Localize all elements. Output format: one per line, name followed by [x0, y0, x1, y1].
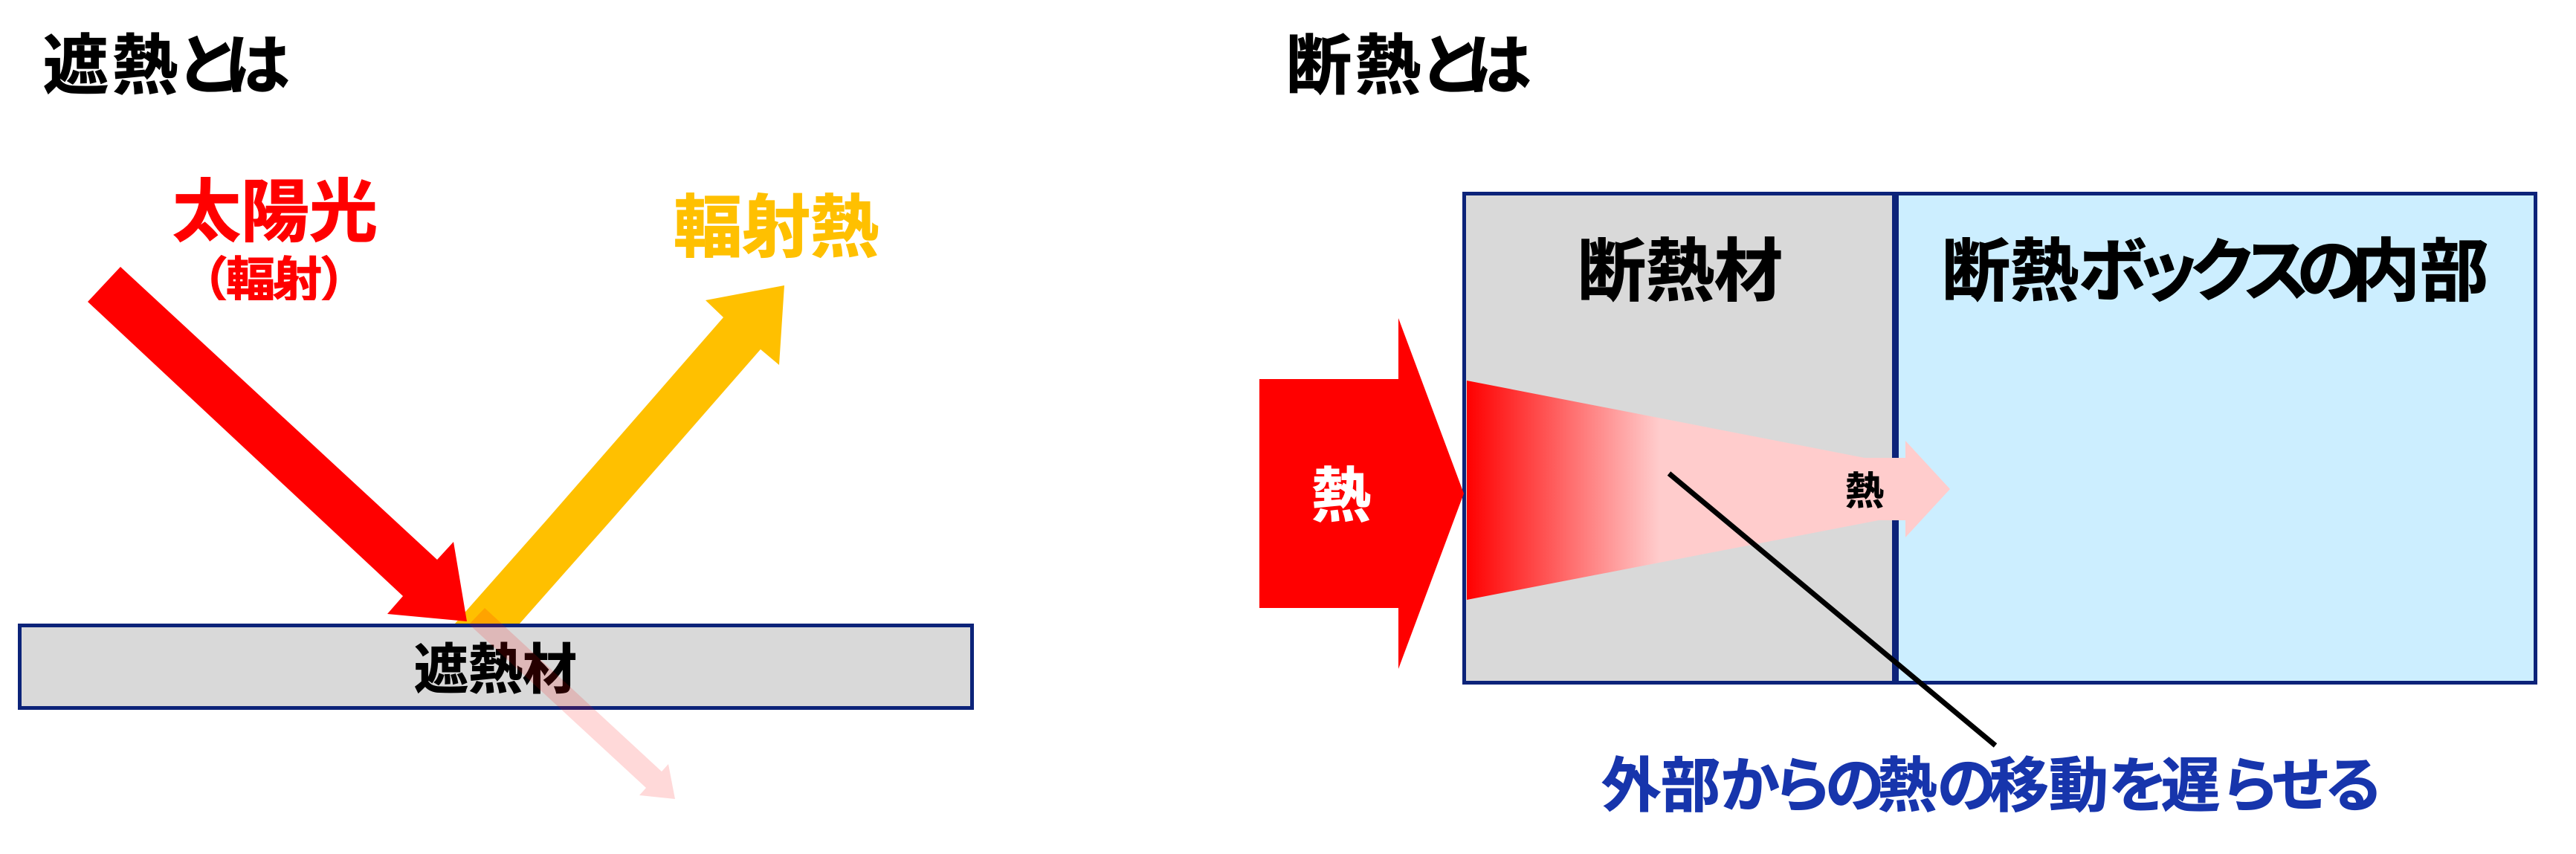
leader line	[1669, 473, 1995, 745]
label: heat, white: 熱	[1311, 463, 1371, 529]
label: heat shielding material: 遮熱材	[414, 640, 577, 700]
panel: heat insulation	[1259, 29, 2535, 819]
label: radiation sub-caption: （輻射）	[179, 253, 367, 308]
panel: heat shielding	[19, 29, 972, 799]
label: radiant heat: 輻射熱	[674, 190, 879, 266]
box: insulation material	[1465, 193, 1896, 682]
label: inside of insulation box: 断熱ボックスの内部	[1942, 234, 2488, 310]
arrow: sunlight incoming	[88, 267, 467, 621]
arrow: radiant heat reflected	[455, 285, 784, 624]
label: heat, small: 熱	[1845, 470, 1884, 514]
callout: slows the movement of heat from outside: 外部からの熱の移動を遅らせる	[1601, 753, 2377, 819]
heading: heat shielding: 遮熱とは	[43, 29, 290, 103]
label: sunlight: 太陽光	[172, 175, 378, 250]
box: heat shielding material	[19, 626, 972, 708]
arrow: transmitted heat	[469, 608, 675, 799]
heading: heat insulation: 断熱とは	[1286, 29, 1531, 103]
arrow: incoming heat	[1259, 318, 1464, 669]
label: insulation material: 断熱材	[1578, 234, 1783, 310]
arrow: heat passing through material	[1467, 381, 1950, 600]
box: inside of insulation box	[1896, 193, 2535, 682]
divider between material and interior	[1892, 193, 1899, 684]
